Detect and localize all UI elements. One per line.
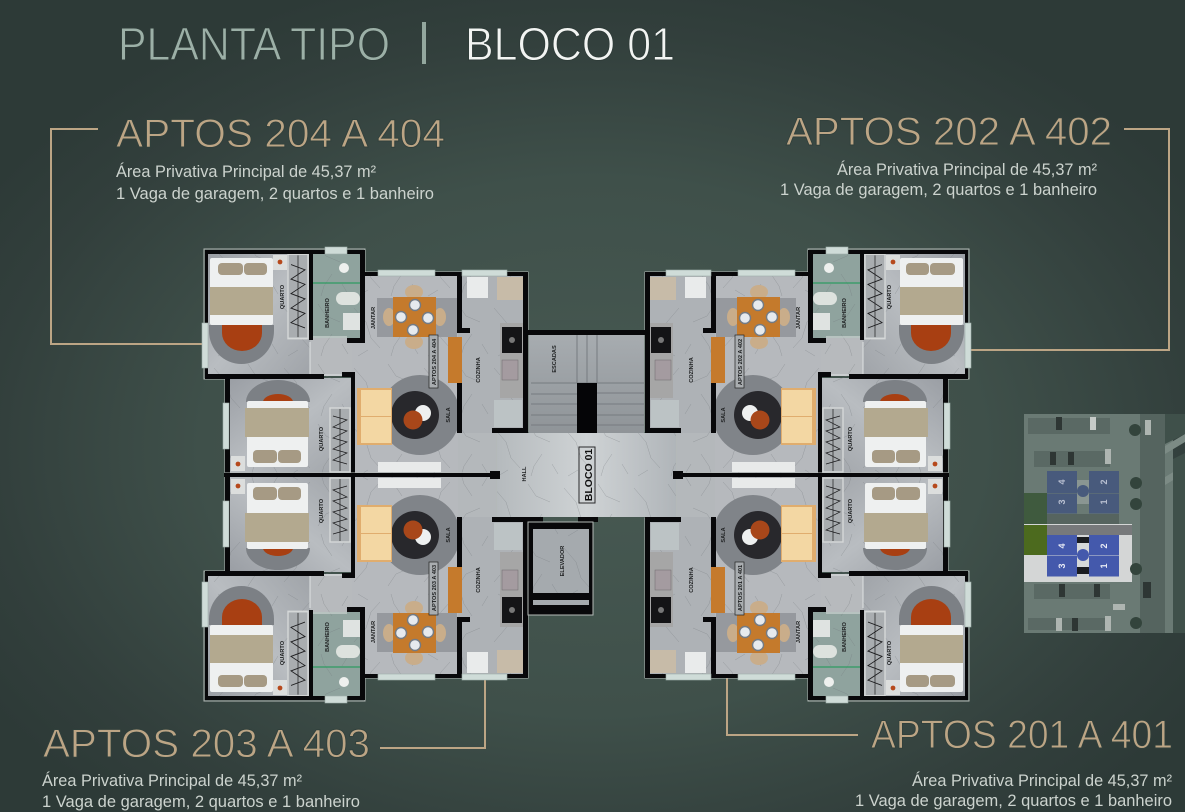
stairs: ESCADAS — [552, 345, 558, 373]
apartment 204 plan: COZINHA — [476, 357, 482, 383]
apartment 204 plan: QUARTO — [280, 284, 286, 309]
trees — [1129, 424, 1142, 629]
callout: apartamentos 203 a 403: 1 Vaga de garagem, 2 quartos e 1 banheiro — [42, 793, 360, 811]
apartment 204 plan: JANTAR — [371, 307, 377, 329]
apartment 203 plan: QUARTO — [280, 640, 286, 665]
apartment 202 plan: APTOS 202 A 402 — [738, 339, 744, 385]
apartment 203 plan: BANHEIRO — [325, 621, 331, 652]
callout: apartamentos 204 a 404: Área Privativa Principal de 45,37 m² — [116, 162, 376, 181]
apartment 203 plan: COZINHA — [476, 567, 482, 593]
callout: apartamentos 202 a 402: APTOS 202 A 402 — [786, 110, 1112, 154]
apartment 202 plan: SALA — [721, 407, 727, 423]
apartment 202 plan — [645, 247, 971, 477]
block 01: 1 — [1099, 563, 1109, 569]
callout: apartamentos 201 a 401 — [727, 678, 1173, 810]
apartment 203 plan: QUARTO — [319, 498, 325, 523]
hall: HALL — [522, 466, 528, 481]
apartment 202 plan: QUARTO — [887, 284, 893, 309]
apartment 203 plan: APTOS 203 A 403 — [432, 565, 438, 611]
apartment 203 plan — [202, 473, 528, 703]
title — [118, 18, 675, 70]
apartment 202 plan: BANHEIRO — [842, 297, 848, 328]
hall — [490, 428, 683, 522]
title: PLANTA TIPO — [118, 18, 390, 70]
apartment 204 plan: APTOS 204 A 404 — [432, 338, 438, 385]
cars — [1050, 417, 1151, 631]
title: BLOCO 01 — [465, 18, 675, 70]
elevator: ELEVADOR — [560, 546, 566, 576]
apartment 201 plan: QUARTO — [887, 640, 893, 665]
apartment 202 plan: QUARTO — [848, 426, 854, 451]
apartment 201 plan: BANHEIRO — [842, 621, 848, 652]
callout: apartamentos 204 a 404: APTOS 204 A 404 — [116, 112, 445, 156]
apartment 204 plan: SALA — [446, 407, 452, 423]
apartment 202 plan: COZINHA — [689, 357, 695, 383]
road — [1140, 414, 1165, 633]
block 01: 3 — [1057, 563, 1067, 569]
apartment 201 plan: COZINHA — [689, 567, 695, 593]
callout: apartamentos 203 a 403: Área Privativa Principal de 45,37 m² — [42, 771, 302, 790]
apartment 201 plan — [645, 473, 971, 703]
apartment 201 plan: JANTAR — [796, 621, 802, 643]
callout: apartamentos 203 a 403: APTOS 203 A 403 — [43, 722, 370, 766]
callout: apartamentos 202 a 402: Área Privativa Principal de 45,37 m² — [837, 160, 1097, 179]
apartment 201 plan: APTOS 201 A 401 — [738, 565, 744, 611]
block 02: 4 — [1057, 479, 1067, 485]
stairs — [528, 330, 645, 435]
apartment 202 plan: JANTAR — [796, 307, 802, 329]
parking — [1028, 418, 1110, 630]
floor plan — [202, 247, 971, 703]
apartment 204 plan: BANHEIRO — [325, 297, 331, 328]
hall: BLOCO 01 — [583, 449, 595, 501]
callout: apartamentos 201 a 401: 1 Vaga de garagem, 2 quartos e 1 banheiro — [855, 792, 1172, 810]
block 01: 4 — [1057, 543, 1067, 549]
block 02: 2 — [1099, 479, 1109, 485]
block 01: 2 — [1099, 543, 1109, 549]
apartment 204 plan: QUARTO — [319, 426, 325, 451]
apartment 204 plan — [202, 247, 528, 477]
callout: apartamentos 204 a 404 — [51, 112, 445, 344]
site locator map — [1024, 414, 1185, 633]
callout: apartamentos 202 a 402: 1 Vaga de garagem, 2 quartos e 1 banheiro — [780, 181, 1097, 199]
block 02: 1 — [1099, 499, 1109, 505]
callout: apartamentos 203 a 403 — [42, 678, 485, 811]
apartment 203 plan: SALA — [446, 527, 452, 543]
block 02 — [1024, 471, 1119, 524]
apartment 201 plan: SALA — [721, 527, 727, 543]
block 01 — [1024, 524, 1132, 582]
callout: apartamentos 204 a 404: 1 Vaga de garagem, 2 quartos e 1 banheiro — [116, 185, 434, 203]
apartment 203 plan: JANTAR — [371, 621, 377, 643]
callout: apartamentos 202 a 402 — [780, 110, 1169, 350]
block 02: 3 — [1057, 499, 1067, 505]
apartment 201 plan: QUARTO — [848, 498, 854, 523]
elevator — [528, 522, 593, 615]
callout: apartamentos 201 a 401: Área Privativa Principal de 45,37 m² — [912, 771, 1172, 790]
